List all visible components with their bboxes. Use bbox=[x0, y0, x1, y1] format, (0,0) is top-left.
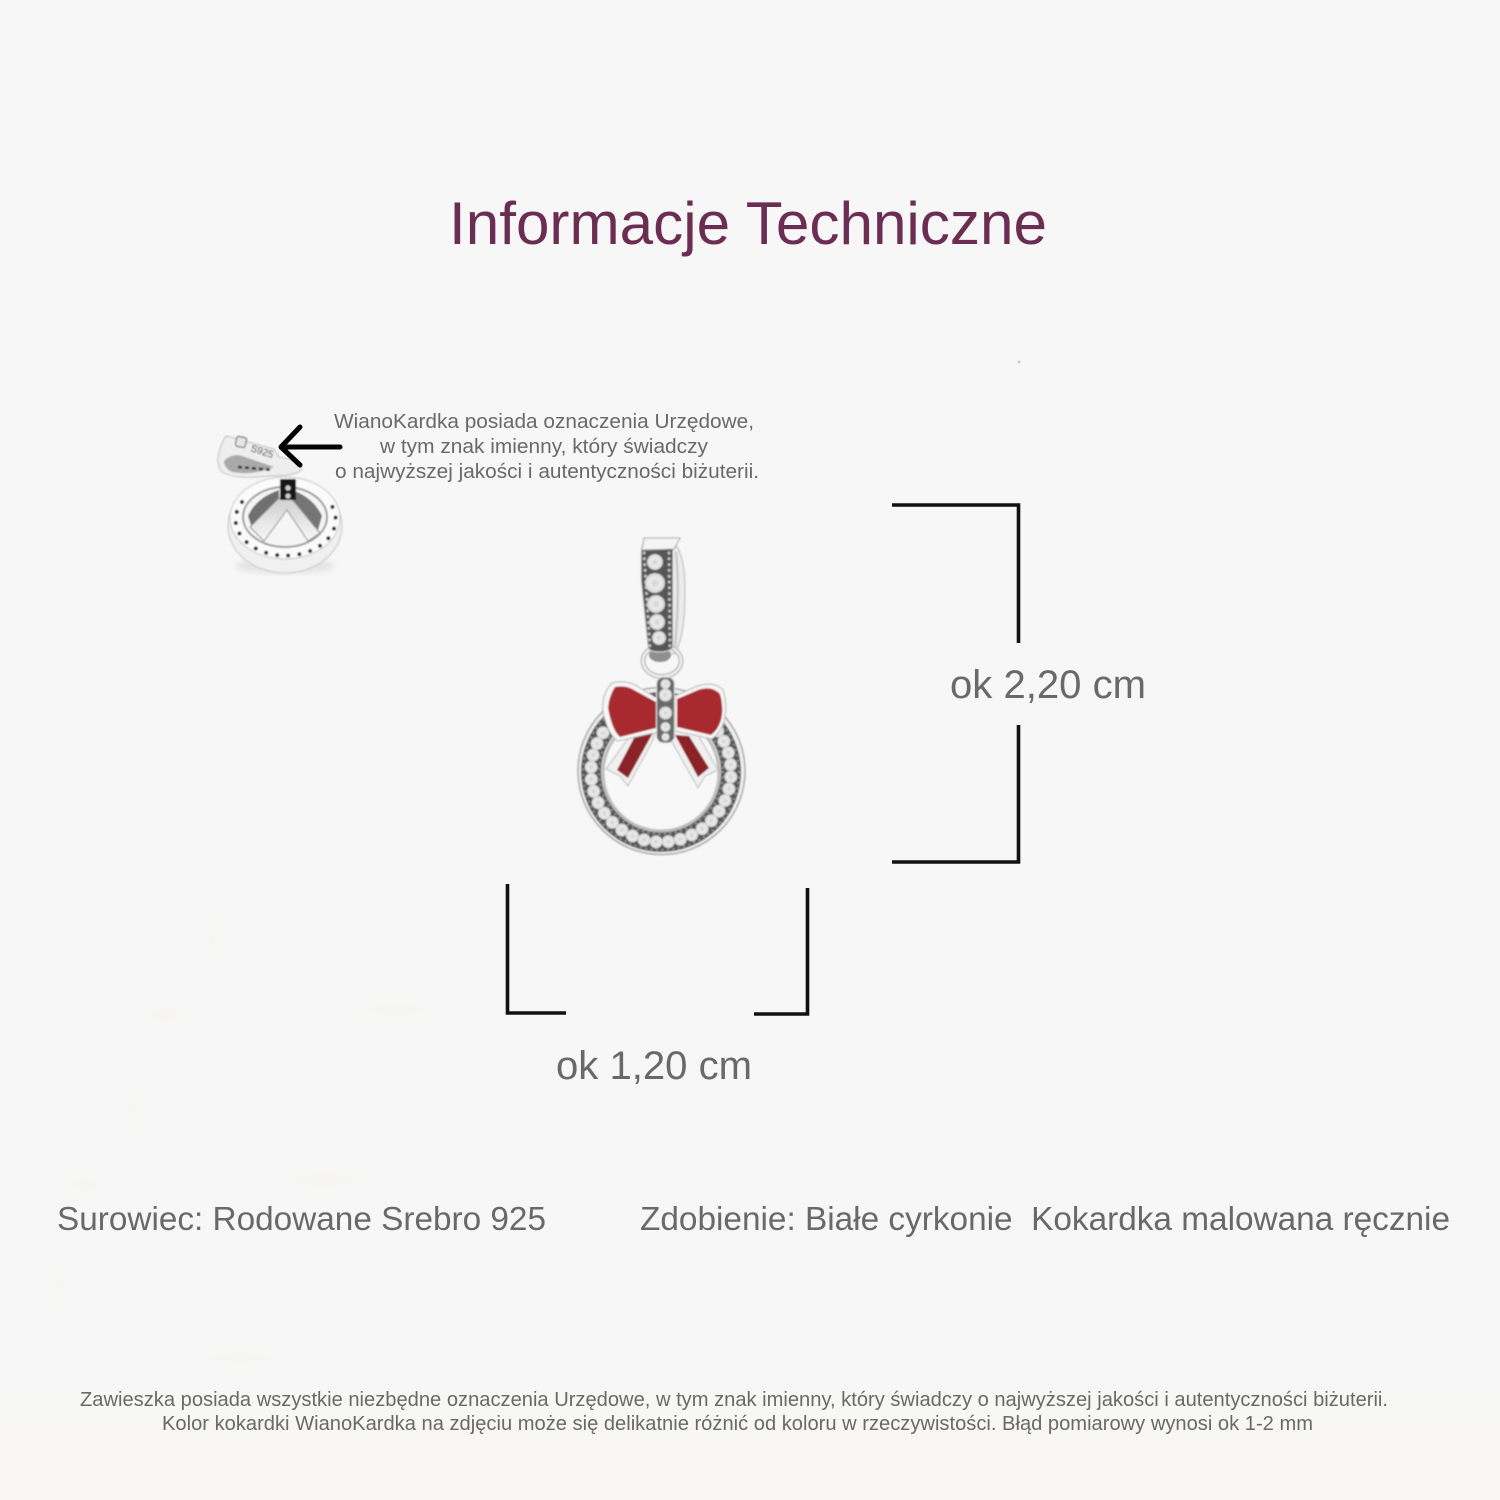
main pendant bbox=[578, 538, 745, 854]
hallmark note text: WianoKardka posiada oznaczenia Urzędowe, bbox=[334, 411, 754, 433]
hallmark note text bbox=[334, 411, 759, 483]
bow loop left bbox=[603, 682, 658, 741]
speck bbox=[1018, 360, 1020, 364]
width label: ok 1,20 cm bbox=[556, 1044, 752, 1088]
bail beads bbox=[644, 553, 670, 649]
faint background smudges bbox=[49, 914, 440, 1370]
decoration: Zdobienie: Białe cyrkonie Kokardka malowana ręcznie bbox=[640, 1201, 1450, 1238]
width bracket bbox=[508, 884, 808, 1014]
bail front bbox=[641, 539, 678, 652]
bail stones bbox=[645, 554, 666, 645]
title: Informacje Techniczne bbox=[449, 190, 1047, 257]
hallmark note text: o najwyższej jakości i autentyczności biżuterii. bbox=[335, 461, 759, 483]
bow tails bbox=[606, 728, 718, 788]
pave band bbox=[591, 702, 731, 842]
footnote bbox=[80, 1389, 1388, 1435]
bail back bbox=[668, 541, 685, 654]
band beads bbox=[583, 694, 739, 850]
faint warm tone at page bottom bbox=[0, 1380, 1500, 1500]
hallmark note text: w tym znak imienny, który świadczy bbox=[379, 436, 708, 458]
bail top rim bbox=[642, 538, 680, 550]
ring outer bbox=[578, 688, 745, 854]
height label: ok 2,20 cm bbox=[950, 663, 1146, 707]
thumbnail: pendant back with hallmark bbox=[218, 436, 342, 574]
tails bbox=[250, 498, 320, 541]
shadow bbox=[235, 558, 335, 574]
jump ring bbox=[643, 646, 681, 676]
height bracket bbox=[892, 505, 1018, 862]
material: Surowiec: Rodowane Srebro 925 bbox=[57, 1201, 546, 1238]
footnote: Kolor kokardki WianoKardka na zdjęciu może się delikatnie różnić od koloru w rzeczywistości. Błąd pomiarowy wynosi ok 1-2 mm bbox=[162, 1413, 1313, 1435]
inner edge bbox=[603, 715, 719, 831]
footnote: Zawieszka posiada wszystkie niezbędne oznaczenia Urzędowe, w tym znak imienny, który świadczy o najwyższej jakości i autentyczności biżuterii. bbox=[80, 1389, 1388, 1411]
knot stones bbox=[659, 679, 672, 741]
centre knot bbox=[280, 479, 296, 500]
arrow to hallmark bbox=[281, 427, 340, 465]
bow loop right bbox=[675, 684, 726, 739]
ring bbox=[228, 477, 342, 573]
bail: S925 bbox=[249, 443, 275, 461]
ring stones bbox=[584, 722, 738, 849]
bail cap bbox=[649, 648, 671, 662]
bow knot bbox=[656, 677, 674, 743]
